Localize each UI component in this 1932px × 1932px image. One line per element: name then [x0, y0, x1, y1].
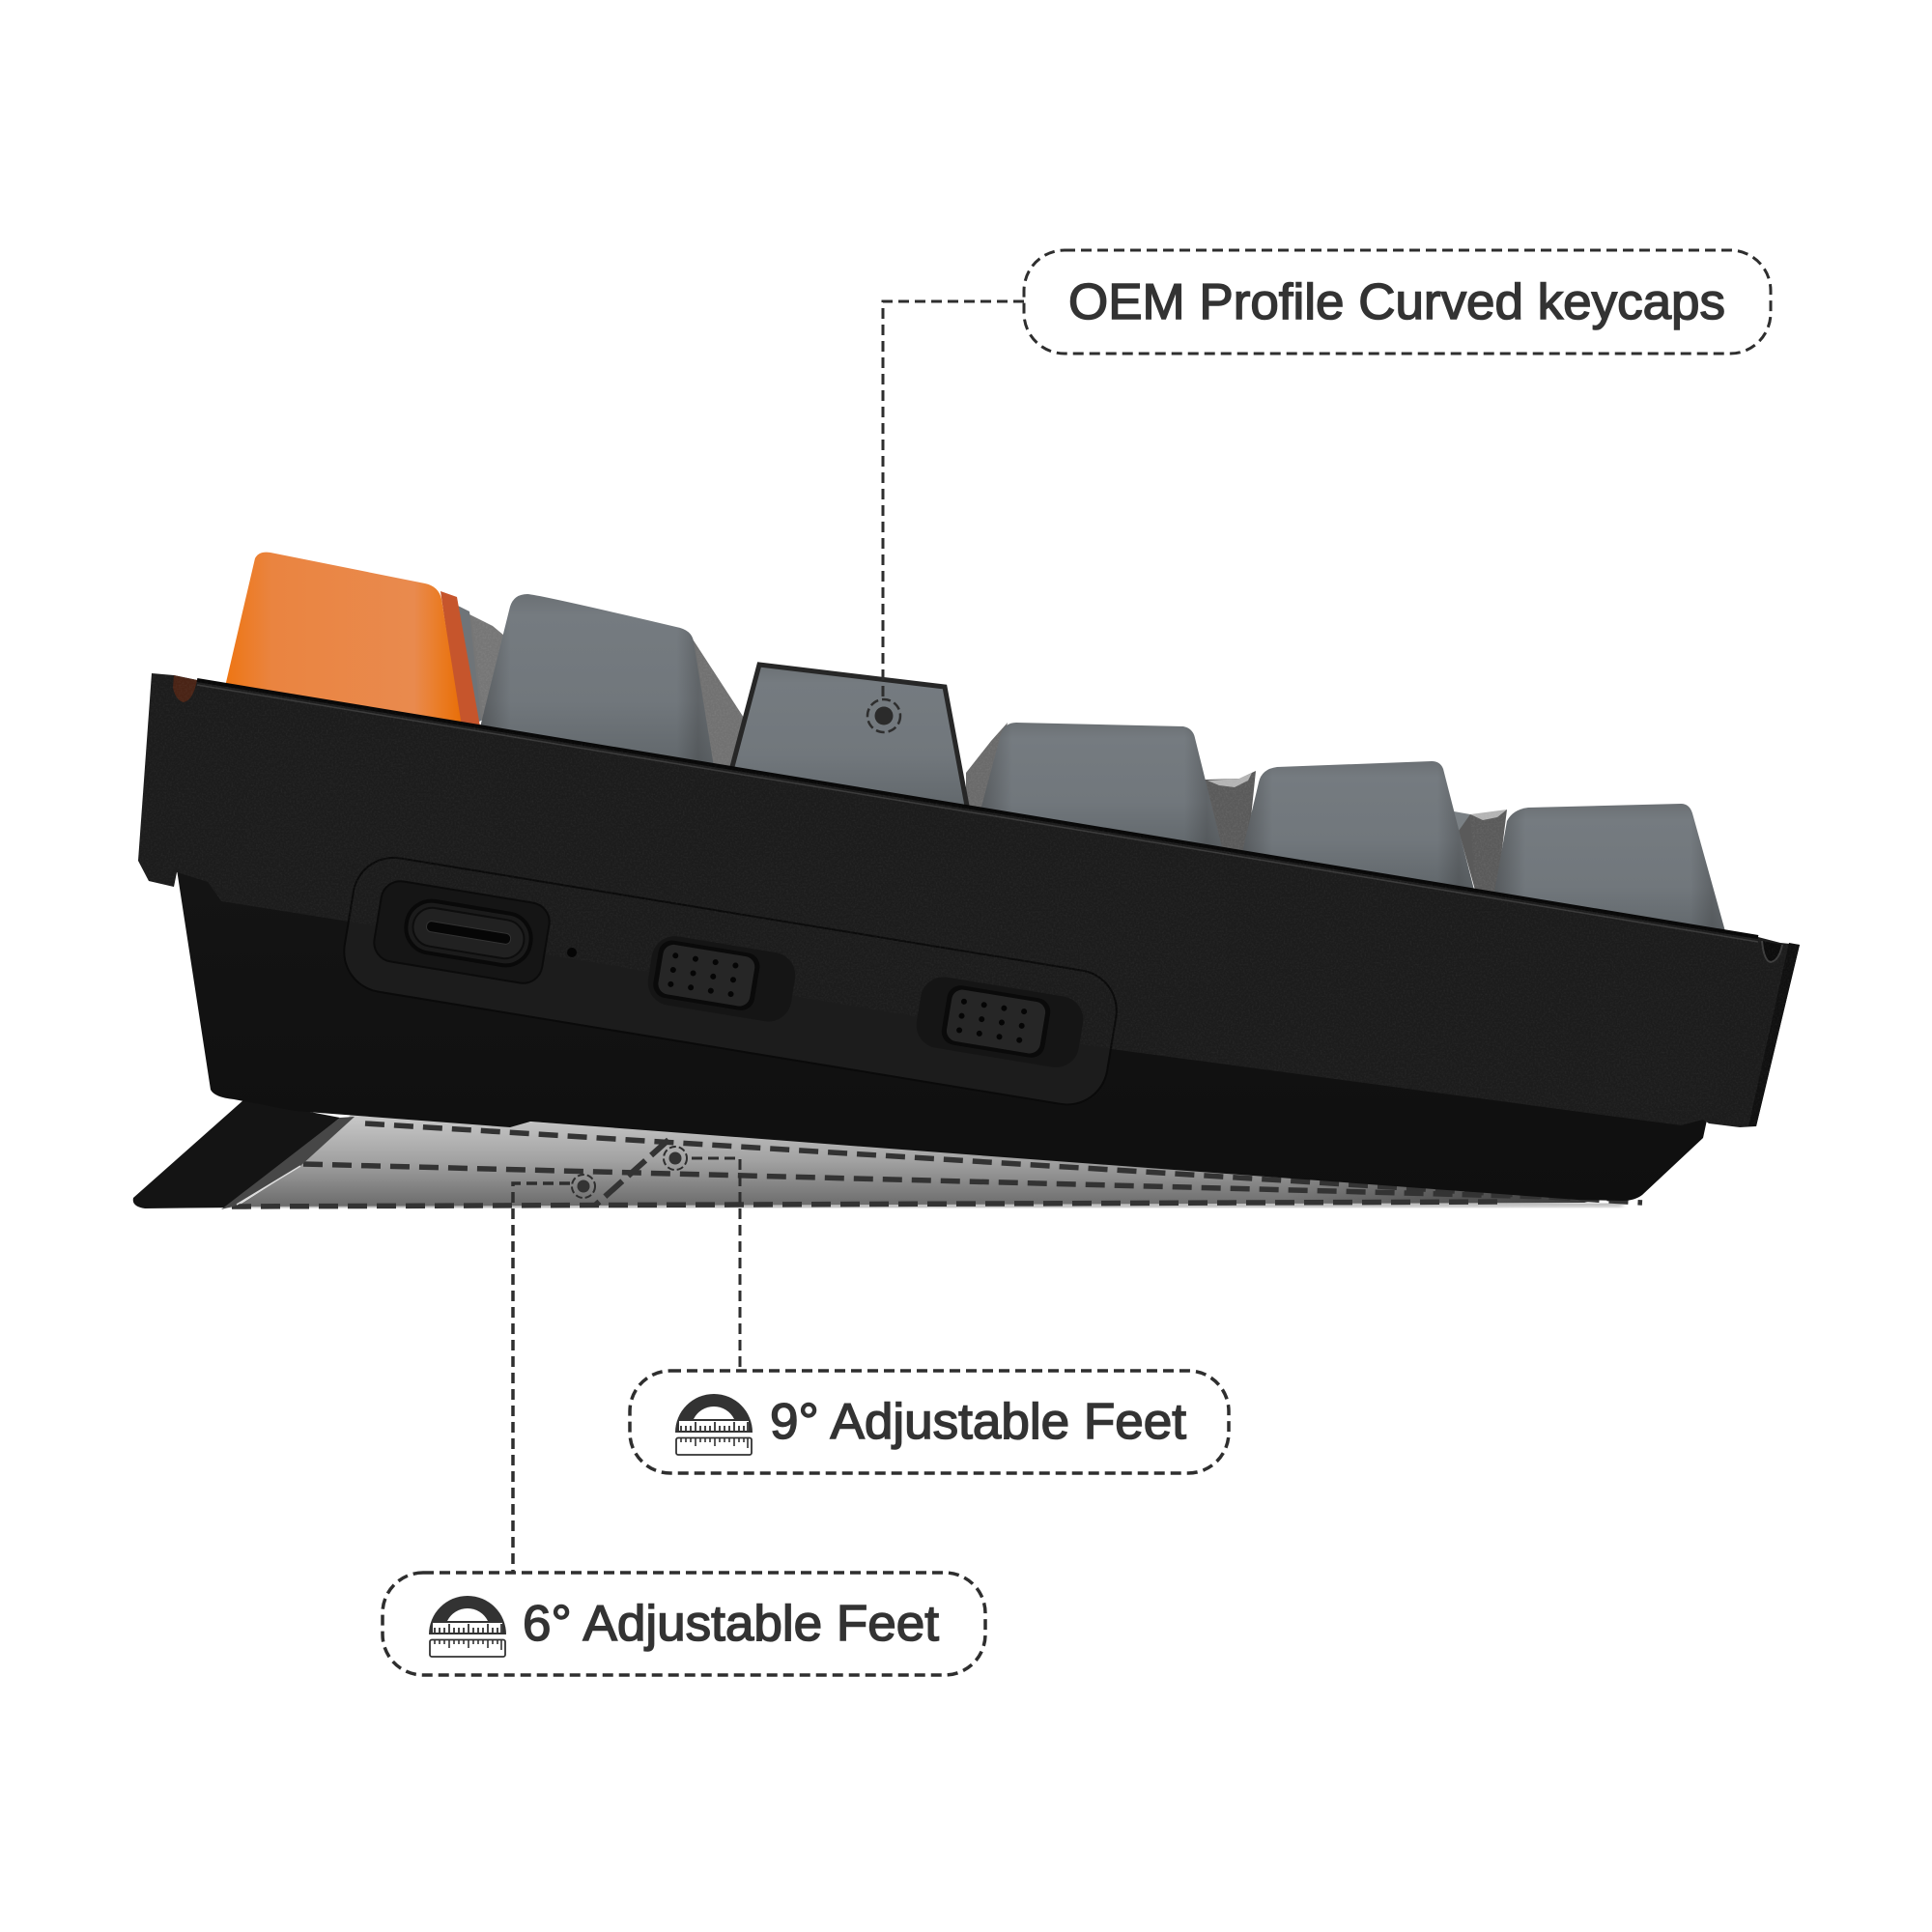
- label text: 9° Adjustable Feet: [770, 1394, 1187, 1450]
- pill outline: [383, 1573, 985, 1675]
- case texture: [135, 667, 1806, 1130]
- highlighted gray keycap: [729, 665, 969, 816]
- leader line: 6 degree: [513, 1183, 570, 1573]
- marker: 6 degree point: [572, 1175, 595, 1198]
- label text: OEM Profile Curved keycaps: [1068, 274, 1725, 330]
- gray keycap 3: [978, 723, 1224, 855]
- orange keycap: [224, 553, 480, 726]
- upper case panel: [138, 673, 1800, 1127]
- ground shadow: [184, 1204, 1623, 1208]
- port panel: [338, 852, 1122, 1111]
- marker: 9 degree point: [664, 1147, 687, 1170]
- back row keycaps: [454, 604, 1507, 903]
- slider switch 1: [644, 933, 799, 1025]
- slider switch 2: [913, 974, 1087, 1070]
- gray keycap 1: [477, 594, 715, 773]
- leader line: keycaps: [883, 301, 1024, 697]
- keyboard illustration: [133, 553, 1806, 1209]
- angle wedge under keyboard: [237, 1111, 1633, 1207]
- callout: OEM profile: [867, 250, 1771, 732]
- icon: protractor and ruler: [675, 1394, 753, 1455]
- adjustable foot: [133, 1099, 355, 1209]
- pill outline: [630, 1371, 1229, 1473]
- icon: protractor and ruler: [429, 1596, 506, 1657]
- gray keycap 5: [1492, 804, 1728, 942]
- callout: 6 degree feet: [383, 1175, 985, 1675]
- port recess: [371, 878, 553, 986]
- leader line: 9 degree: [692, 1158, 740, 1371]
- pill outline: [1024, 250, 1771, 354]
- marker: keycap point: [867, 699, 900, 732]
- label text: 6° Adjustable Feet: [523, 1596, 940, 1652]
- gray keycap 4: [1239, 761, 1475, 894]
- indicator dot: [567, 948, 577, 957]
- keycap side texture: [476, 622, 1505, 891]
- callout: 9 degree feet: [630, 1147, 1229, 1473]
- angle dashed guides: [232, 1123, 1642, 1207]
- lower chassis: [177, 869, 1709, 1201]
- USB-C port: [402, 897, 535, 969]
